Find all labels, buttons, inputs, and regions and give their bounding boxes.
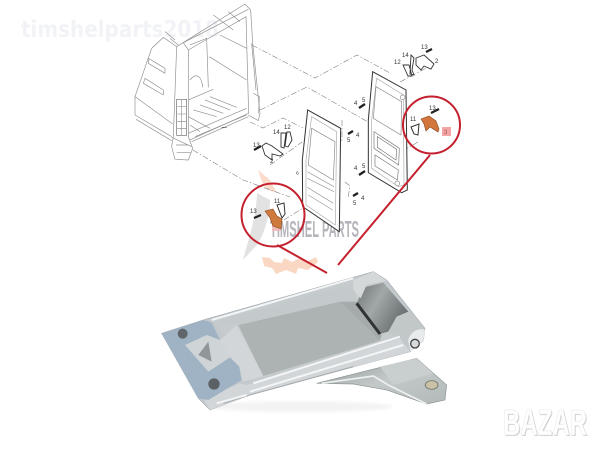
small parts: upper left hinge group: 13 (253, 143, 260, 149)
highlighted part detail: right door hinge (410, 106, 451, 136)
small parts: upper right hinge group: 14 (402, 53, 409, 59)
front face (203, 338, 410, 410)
small parts: upper right hinge group (394, 45, 439, 76)
door: left rear door: 6 (296, 171, 299, 177)
red pointer line: right circle to hinge (338, 155, 430, 265)
watermark: gear logo (243, 170, 322, 274)
bolts with numbers 4 and 5 (347, 98, 366, 207)
bolts with numbers 4 and 5: 5 (362, 98, 366, 104)
hinge knuckle (357, 283, 408, 334)
hinge product photo (162, 272, 447, 412)
van rear line drawing (135, 4, 260, 160)
bolts with numbers 4 and 5: 4 (354, 166, 358, 172)
mounting plate (162, 320, 242, 400)
highlighted part detail: right door hinge: 13 (429, 106, 436, 112)
small parts: upper right hinge group: 13 (421, 45, 428, 51)
door: left rear door (296, 110, 341, 232)
highlighted part detail: left door hinge: 13 (250, 209, 257, 215)
small parts: upper left hinge group: 2 (270, 159, 274, 165)
small parts: upper left hinge group: 14 (273, 130, 280, 136)
red highlight circle: right door (403, 96, 460, 154)
bolts with numbers 4 and 5: 5 (353, 201, 357, 207)
infographic canvas: TIMSHEL PARTS (270, 216, 359, 242)
door: right rear door (368, 72, 407, 193)
main plate silhouette (162, 272, 425, 410)
highlight edges (212, 278, 403, 403)
bolts with numbers 4 and 5: 4 (356, 133, 360, 139)
bolts with numbers 4 and 5: 5 (347, 138, 351, 144)
highlighted part detail: right door hinge: 11 (410, 117, 417, 123)
recess floor (238, 302, 380, 376)
small parts: upper right hinge group: 12 (394, 60, 401, 66)
highlighted part detail: right door hinge: 3 (444, 130, 448, 136)
bolts with numbers 4 and 5: 4 (354, 101, 358, 107)
small parts: upper left hinge group: 12 (284, 125, 291, 131)
highlighted part detail: left door hinge: 11 (274, 199, 281, 205)
lower arm (317, 358, 447, 404)
small parts: upper right hinge group: 2 (435, 59, 439, 65)
highlighted part detail: left door hinge (250, 199, 285, 231)
bolts with numbers 4 and 5: 5 (362, 164, 366, 170)
small parts: upper left hinge group (253, 125, 292, 165)
red pointer line: left circle to hinge (277, 245, 327, 273)
red highlight circle: left door (242, 184, 304, 246)
dashed leader lines (193, 45, 432, 220)
watermark: shop name top left: timshelparts2018 (21, 17, 219, 43)
bolts with numbers 4 and 5: 4 (361, 196, 365, 202)
recess walls (212, 280, 403, 383)
